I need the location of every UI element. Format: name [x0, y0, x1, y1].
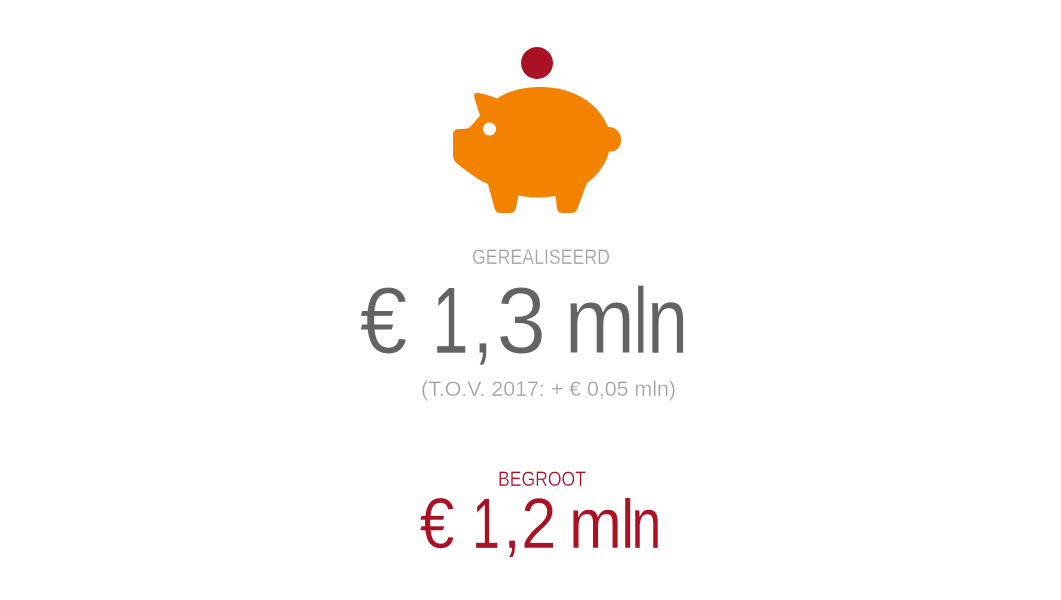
value: 1,3 mln: n: [647, 268, 688, 374]
value: 1,3 mln: 1: [432, 268, 469, 374]
label: gerealiseerd: GEREALISEERD: [472, 246, 610, 269]
value: 1,2 mln: ,: [503, 485, 521, 564]
note: compared to 2017: (T.O.V. 2017: + € 0,05 mln): [421, 378, 676, 401]
icon: red coin: [521, 47, 553, 79]
value: 1,2 mln: 2: [521, 485, 557, 564]
value: 1,3 mln: ,: [472, 268, 494, 374]
value: 1,3 mln: €: [360, 268, 408, 374]
value: 1,2 mln: 1: [472, 485, 500, 564]
value: 1,3 mln: [360, 268, 688, 374]
icon: orange piggy bank: [453, 87, 621, 213]
value: 1,2 mln: [420, 485, 661, 564]
label: begroot: BEGROOT: [498, 468, 586, 491]
value: 1,3 mln: l: [634, 269, 648, 373]
icon: pig eye: [483, 122, 496, 136]
value: 1,3 mln: m: [564, 268, 635, 374]
value: 1,2 mln: l: [621, 486, 634, 563]
value: 1,2 mln: €: [420, 485, 454, 564]
value: 1,3 mln: 3: [496, 268, 546, 374]
value: 1,2 mln: n: [631, 485, 661, 564]
value: 1,2 mln: m: [569, 485, 622, 564]
